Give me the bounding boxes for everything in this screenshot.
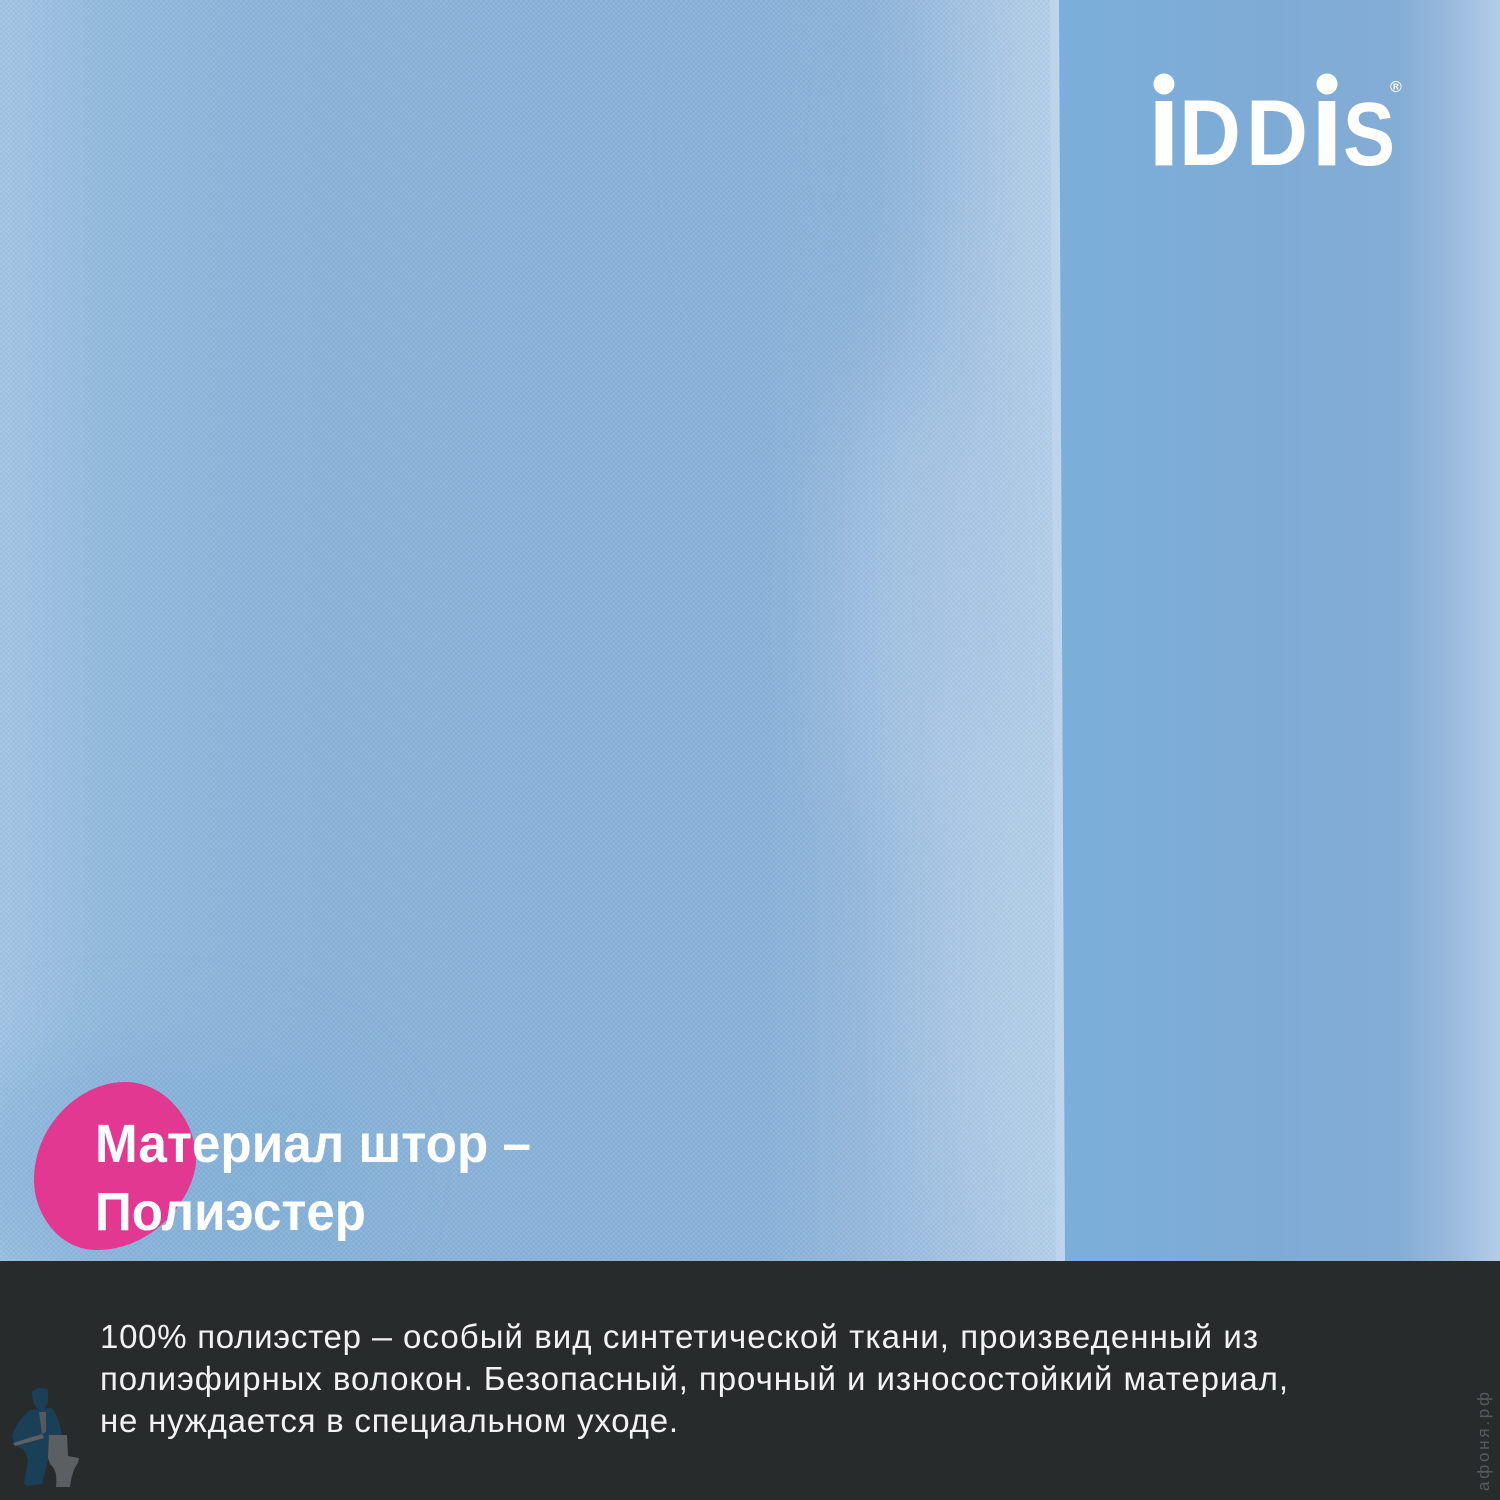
icon: pink blob behind heading — [34, 1082, 196, 1250]
text block: material description — [100, 1318, 1288, 1439]
logo: IDDIS: D — [1179, 80, 1241, 185]
icon: plumber with toilet watermark — [12, 1388, 79, 1487]
text block: material description: полиэфирных волокон. Безопасный, прочный и износостойкий материал, — [100, 1360, 1288, 1397]
logo: IDDIS — [1147, 55, 1402, 191]
logo: IDDIS: i — [1147, 55, 1181, 191]
logo: IDDIS: i — [1310, 55, 1344, 191]
heading: material title — [95, 1114, 531, 1242]
text block: material description: особый вид синтетической ткани, произведенный из — [403, 1318, 1258, 1355]
logo: IDDIS: D — [1246, 80, 1308, 185]
panel: polyester fabric close-up — [0, 0, 1080, 1290]
logo: IDDIS: S — [1343, 85, 1395, 185]
heading: material title: Полиэстер — [95, 1182, 366, 1242]
heading: material title: Материал штор – — [95, 1114, 531, 1174]
text block: material description: 100% полиэстер — [100, 1318, 361, 1355]
text: site watermark: афоня.рф — [1474, 1392, 1493, 1491]
logo: IDDIS: ® — [1390, 79, 1402, 96]
panel: plain curtain side area — [1040, 0, 1500, 1261]
text block: material description: — — [372, 1318, 392, 1355]
text block: material description: не нуждается в специальном уходе. — [100, 1402, 678, 1439]
panel: dark description band — [0, 1261, 1500, 1500]
